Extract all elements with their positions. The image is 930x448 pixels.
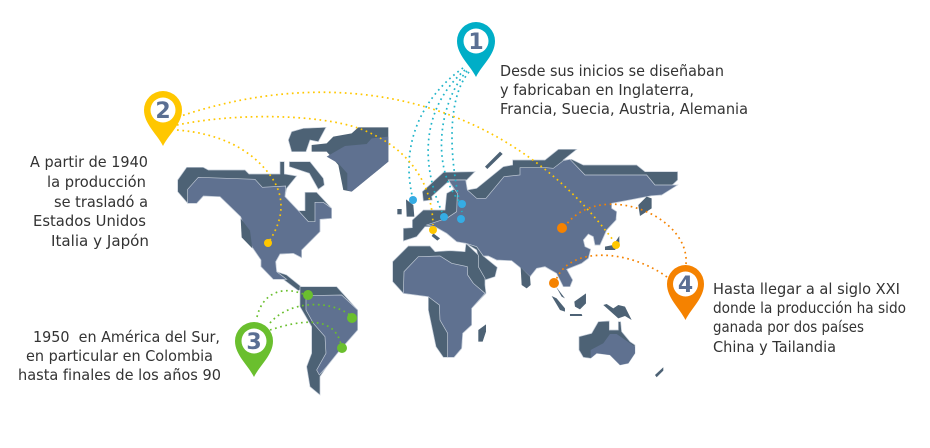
pin 4: 4 — [678, 273, 693, 298]
text block 2: Estados Unidos — [33, 212, 146, 230]
Australia — [579, 321, 635, 365]
South America — [300, 287, 358, 395]
Kamchatka — [638, 197, 652, 216]
Scandinavia — [422, 172, 475, 201]
India tip — [521, 267, 531, 288]
text block 4: Hasta llegar a al siglo XXI — [713, 280, 900, 298]
text block 4: China y Tailandia — [713, 338, 836, 356]
location dots: Europe origin — [409, 196, 466, 223]
pin 1: 1 — [468, 30, 484, 55]
North America — [178, 162, 332, 291]
text block 1: Francia, Suecia, Austria, Alemania — [500, 100, 748, 118]
text block 4 — [713, 280, 906, 356]
Eurasia — [403, 149, 678, 287]
pin 4 — [667, 265, 704, 320]
map: the Americas — [178, 127, 388, 395]
pin 3 — [235, 322, 273, 377]
New Guinea — [603, 304, 632, 320]
Novaya Zemlya — [485, 152, 503, 169]
text block 2: se trasladó a — [54, 193, 148, 211]
pin 3: 3 — [246, 330, 262, 355]
New Zealand — [655, 367, 663, 377]
text block 4: donde la producción ha sido — [713, 299, 906, 317]
Japan — [605, 236, 619, 250]
Great Britain — [406, 199, 414, 217]
Greenland — [312, 127, 388, 192]
location dots: South America — [303, 290, 357, 353]
Malay peninsula — [556, 287, 565, 298]
Arctic islands — [288, 127, 326, 152]
text block 2 — [30, 153, 149, 250]
Borneo — [574, 293, 586, 309]
pin 2 — [144, 91, 182, 146]
text block 1: y fabricaban en Inglaterra, — [500, 81, 694, 99]
text block 3: hasta finales de los años 90 — [18, 366, 221, 384]
world map — [18, 22, 906, 395]
location dots: USA, Italy, Japan — [264, 226, 620, 249]
map: Europe, Africa, Asia and Oceania — [393, 149, 678, 377]
pin 1 — [457, 22, 495, 77]
west coast shadow — [241, 218, 252, 248]
text block 4: ganada por dos países — [713, 318, 864, 336]
text block 3: en particular en Colombia — [26, 347, 213, 365]
text block 2: A partir de 1940 — [30, 153, 148, 171]
location dots: China and Thailand — [549, 223, 567, 288]
pin 2: 2 — [155, 99, 171, 124]
text block 1: Desde sus inicios se diseñaban — [500, 62, 724, 80]
route lines: pin 2 — [177, 92, 613, 240]
Sumatra — [552, 296, 565, 312]
Baffin island — [289, 162, 324, 189]
text block 2: la producción — [47, 173, 146, 191]
text block 1 — [500, 62, 748, 118]
Java — [570, 314, 582, 316]
route lines: pin 4 — [556, 204, 686, 280]
text block 2: Italia y Japón — [51, 232, 149, 250]
route lines: pin 3 — [257, 291, 350, 345]
Madagascar — [478, 324, 486, 342]
text block 3 — [18, 328, 221, 384]
text block 3: 1950 en América del Sur, — [33, 328, 220, 346]
Italy — [432, 233, 440, 241]
Africa — [393, 243, 486, 357]
route lines: pin 1 to Europe — [409, 68, 469, 212]
Ireland — [397, 209, 402, 214]
South America and northern islands — [288, 127, 388, 395]
